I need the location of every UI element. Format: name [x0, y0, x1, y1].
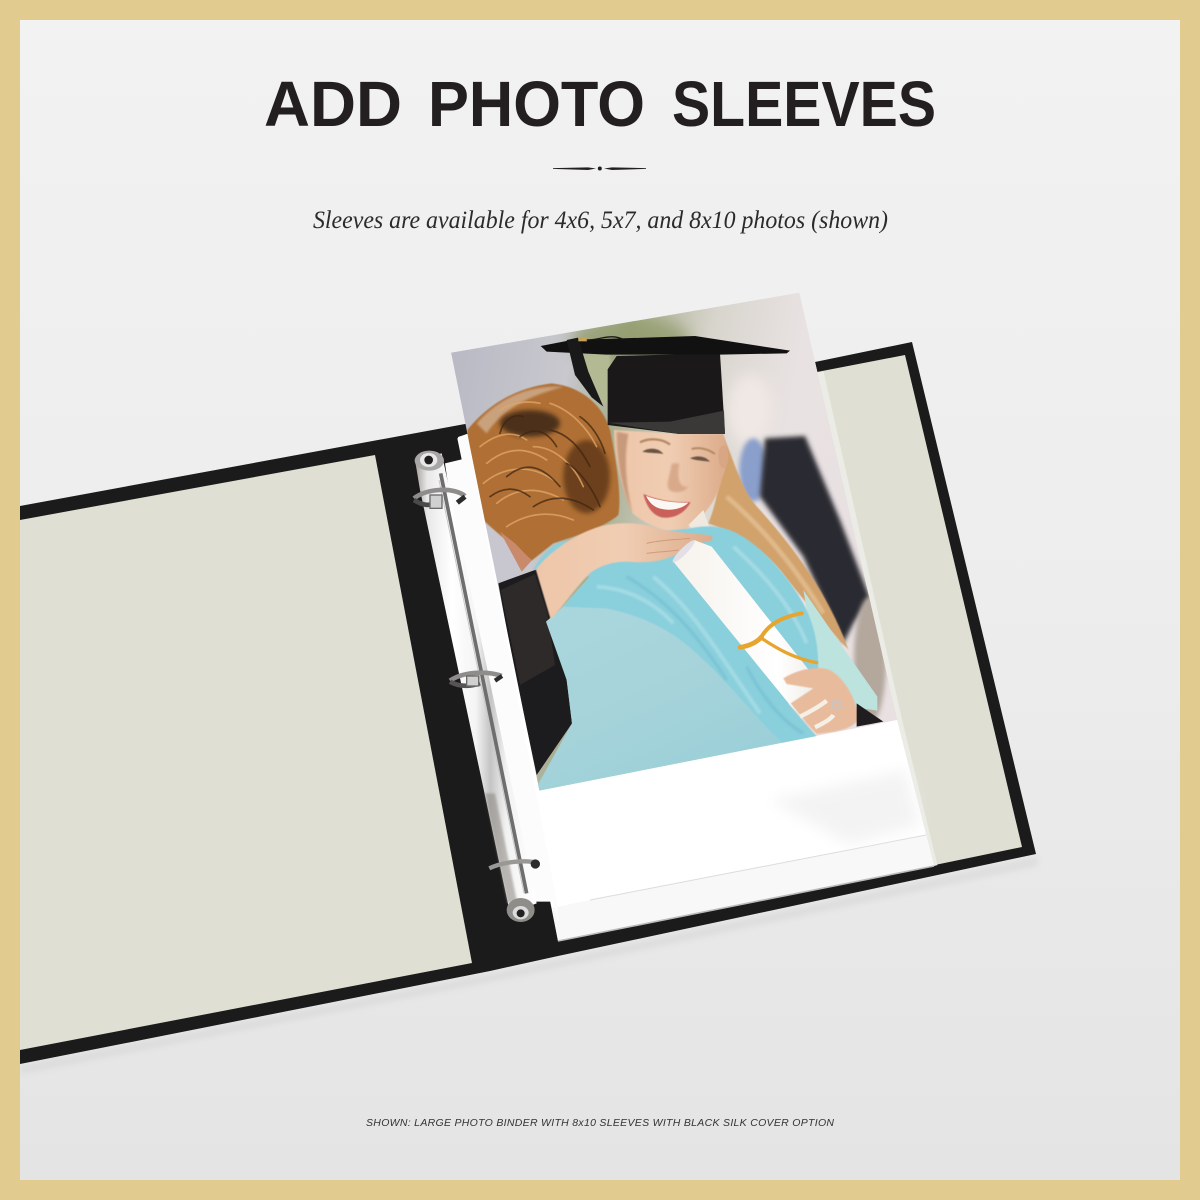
long blonde hair	[708, 437, 848, 649]
dark hair core	[500, 410, 560, 437]
photo sleeve	[458, 372, 934, 941]
sleeve lower pocket band	[552, 835, 934, 941]
light wall behind gown	[484, 518, 494, 564]
top ring	[414, 490, 465, 508]
sweater right side	[803, 590, 877, 711]
gown sheer band	[501, 574, 555, 685]
subtitle: Sleeves are available for 4x6, 5x7, and 8x10 photos (shown)	[313, 207, 888, 234]
sleeve hole strip	[445, 434, 559, 924]
diploma between fingers	[800, 701, 833, 727]
parent's turquoise sweater	[537, 577, 817, 791]
teeth	[646, 496, 688, 510]
tassel	[567, 338, 603, 407]
open photo binder	[20, 342, 1038, 1074]
blurred blue shirt	[739, 438, 767, 502]
rod highlight	[439, 480, 524, 893]
sleeve edge line	[558, 866, 934, 941]
patterned scarf	[533, 526, 818, 743]
ear	[718, 445, 728, 468]
bottom ring	[489, 859, 540, 869]
dark hair lower	[563, 440, 610, 513]
caption: SHOWN: LARGE PHOTO BINDER WITH 8x10 SLEEVES WITH BLACK SILK COVER OPTION	[366, 1117, 834, 1129]
soft binder shadow	[20, 856, 1038, 1074]
bottom rivet	[507, 898, 535, 922]
blurred lower right	[854, 597, 886, 723]
photo blurred background	[451, 293, 897, 791]
scarf darker folds	[627, 577, 803, 733]
chrome rail	[415, 453, 537, 913]
tassel cord	[587, 337, 623, 340]
sleeve pocket line	[590, 835, 926, 900]
middle ring	[450, 673, 502, 686]
title: PHOTO	[428, 68, 645, 140]
graduate's arm and hand	[536, 523, 713, 619]
hairline shadow	[617, 432, 633, 513]
black gown	[498, 569, 572, 775]
gown cuff	[857, 703, 883, 727]
graduate's white collar	[688, 510, 708, 528]
graduate's face	[614, 430, 727, 531]
nose shadow	[668, 463, 688, 492]
parent's auburn hair	[467, 383, 619, 561]
photograph: graduate hugging parent	[451, 293, 897, 791]
rolled diploma	[673, 540, 847, 734]
binder ring mechanism	[414, 434, 559, 924]
orange ribbon	[740, 613, 817, 663]
eyes and brows	[640, 439, 715, 462]
ring	[833, 701, 841, 709]
finger lines	[647, 538, 690, 553]
translucent sleeve right edge	[820, 372, 934, 866]
parent's neck	[500, 532, 532, 572]
foliage glimpse	[570, 317, 690, 363]
blurred dark figure	[760, 436, 870, 643]
title: ADD	[264, 68, 402, 140]
graduate's lower hand	[783, 668, 859, 734]
blurred bright figure	[726, 375, 769, 442]
hair strands	[480, 402, 605, 527]
sleeve body	[458, 433, 934, 941]
left cream panel	[20, 455, 472, 1050]
faint sleeve shadow	[770, 770, 920, 845]
scarf lighter folds	[597, 547, 807, 713]
lips	[643, 494, 691, 518]
ornamental divider	[553, 166, 646, 170]
graduation cap body	[608, 353, 725, 434]
hair base	[467, 383, 619, 561]
top rivet	[415, 451, 444, 471]
foliage behind tassel	[584, 354, 610, 403]
cap lower translucent band	[608, 411, 725, 434]
rail dark lower shadow	[485, 793, 517, 903]
tassel gold clasp	[578, 338, 587, 341]
mortarboard	[541, 336, 790, 355]
ring rod	[441, 473, 527, 893]
blonde hair highlight	[727, 497, 823, 613]
title	[264, 68, 936, 140]
title: SLEEVES	[672, 68, 936, 140]
diploma opening	[670, 538, 697, 565]
right cream panel	[817, 355, 1022, 866]
black silk cover	[20, 342, 1036, 1064]
light top of hair	[477, 387, 563, 433]
